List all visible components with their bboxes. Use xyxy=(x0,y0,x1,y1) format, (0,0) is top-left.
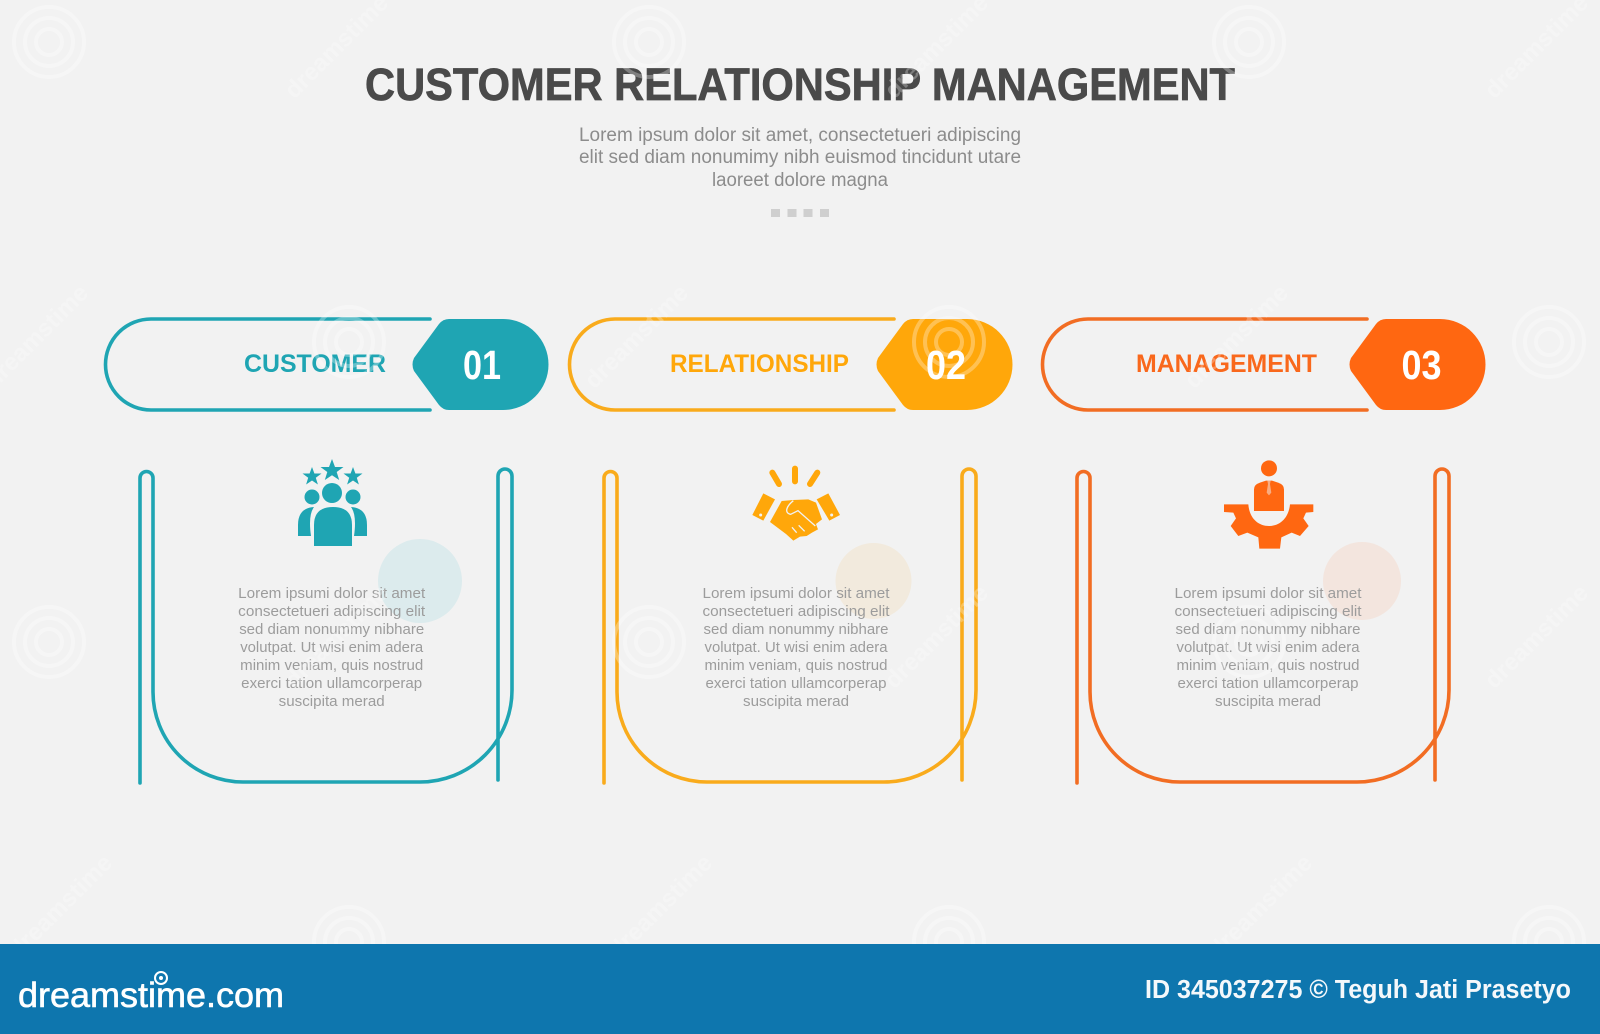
body text: customer: minim veniam, quis nostrud xyxy=(240,657,423,674)
body text: relationship: exerci tation ullamcorperap xyxy=(706,675,886,692)
diagonal watermark text: dreamstime xyxy=(4,850,118,964)
icon: customers with stars xyxy=(298,459,367,546)
subtitle text: elit sed diam nonumimy nibh euismod tincidunt utare xyxy=(579,147,1021,168)
body text: customer: sed diam nonummy nibhare xyxy=(239,621,424,638)
body text: customer xyxy=(238,585,426,710)
panel: relationship xyxy=(570,319,1013,783)
panel: customer xyxy=(106,319,549,783)
number badge: 03 xyxy=(1350,319,1486,410)
body text: management xyxy=(1174,585,1362,710)
content frame: relationship xyxy=(604,469,976,783)
body text: management: exerci tation ullamcorperap xyxy=(1178,675,1358,692)
footer credit: ID 345037275 © Teguh Jati Prasetyo xyxy=(1145,976,1571,1004)
body text: relationship: minim veniam, quis nostrud xyxy=(704,657,888,674)
heading: relationship: RELATIONSHIP xyxy=(670,350,849,378)
footer bar xyxy=(0,944,1600,1034)
body text: relationship: Lorem ipsumi dolor sit amet xyxy=(702,585,890,602)
panel: management xyxy=(1042,319,1486,783)
body text: customer: consectetueri adipiscing elit xyxy=(238,603,426,620)
content frame: customer xyxy=(140,469,512,783)
body text: management: volutpat. Ut wisi enim adera xyxy=(1176,639,1360,656)
body text: management: minim veniam, quis nostrud xyxy=(1176,657,1360,674)
number badge: 01 xyxy=(412,319,548,410)
heading: customer: CUSTOMER xyxy=(244,350,386,378)
subtitle text: laoreet dolore magna xyxy=(712,170,888,191)
divider dots xyxy=(771,209,829,217)
diagonal watermark text: dreamstime xyxy=(880,580,994,694)
diagonal watermark text: dreamstime xyxy=(1480,580,1594,694)
header pill outline: management xyxy=(1042,319,1367,410)
content frame: management xyxy=(1077,469,1449,783)
footer logo: dreamstime.com xyxy=(18,976,284,1015)
number badge: 02 xyxy=(876,319,1013,410)
header pill outline: relationship xyxy=(570,319,894,410)
body text: management: consectetueri adipiscing elit xyxy=(1174,603,1362,620)
number badge: 02: 02 xyxy=(926,342,966,388)
subtitle text: Lorem ipsum dolor sit amet, consectetueri adipiscing xyxy=(579,125,1021,146)
body text: customer: Lorem ipsumi dolor sit amet xyxy=(238,585,426,602)
diagonal watermark text: dreamstime xyxy=(1204,850,1318,964)
background circle: customer xyxy=(378,539,462,623)
icon: handshake xyxy=(752,469,840,541)
heading: management: MANAGEMENT xyxy=(1136,350,1317,378)
background circle: relationship xyxy=(836,543,912,619)
body text: relationship: sed diam nonummy nibhare xyxy=(704,621,888,638)
body text: customer: volutpat. Ut wisi enim adera xyxy=(240,639,424,656)
diagonal watermark text: dreamstime xyxy=(604,850,718,964)
diagonal watermark text: dreamstime xyxy=(1180,280,1294,394)
body text: relationship: consectetueri adipiscing elit xyxy=(702,603,890,620)
subtitle text xyxy=(579,125,1021,191)
body text: relationship: suscipita merad xyxy=(743,693,849,710)
icon: manager over gear xyxy=(1224,460,1313,549)
number badge: 03: 03 xyxy=(1402,342,1442,388)
body text: relationship xyxy=(702,585,890,710)
body text: relationship: volutpat. Ut wisi enim adera xyxy=(704,639,888,656)
body text: management: suscipita merad xyxy=(1215,693,1321,710)
background circle: management xyxy=(1323,542,1401,620)
diagonal watermark text: dreamstime xyxy=(580,280,694,394)
body text: customer: exerci tation ullamcorperap xyxy=(241,675,422,692)
header pill outline: customer xyxy=(106,319,430,410)
body text: management: Lorem ipsumi dolor sit amet xyxy=(1174,585,1362,602)
body text: customer: suscipita merad xyxy=(279,693,385,710)
diagonal watermark text: dreamstime xyxy=(280,580,394,694)
number badge: 01: 01 xyxy=(463,342,501,388)
body text: management: sed diam nonummy nibhare xyxy=(1176,621,1360,638)
title: CUSTOMER RELATIONSHIP MANAGEMENT xyxy=(365,59,1235,110)
